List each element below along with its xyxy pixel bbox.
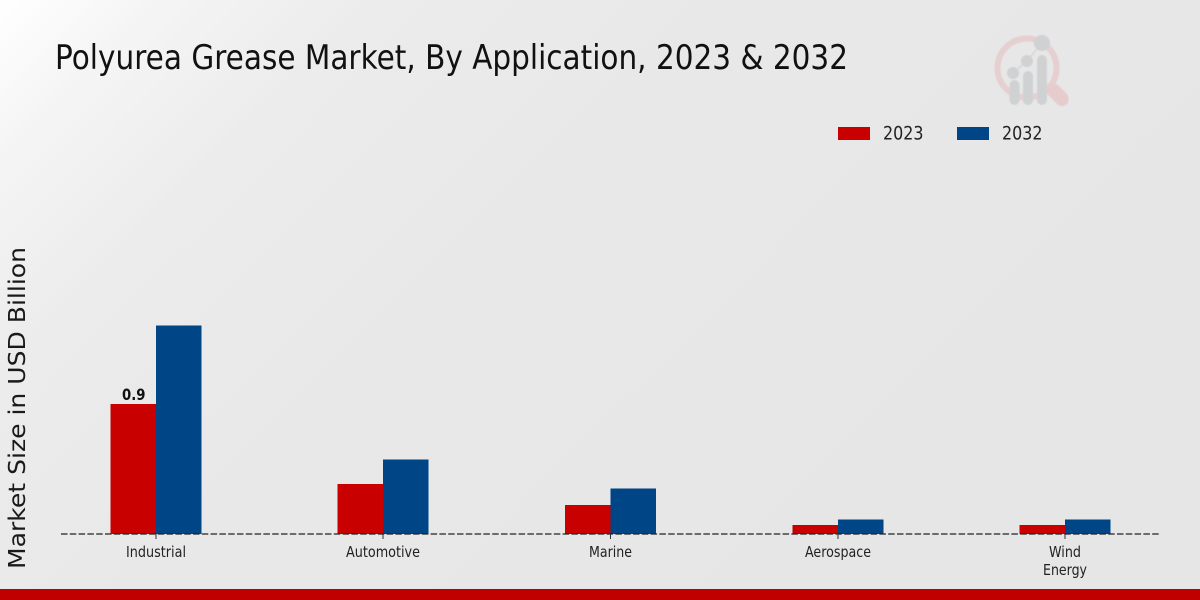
legend <box>838 122 1042 144</box>
x-axis label: Industrial: Industrial <box>126 543 186 561</box>
y-axis title: Market Size in USD Billion <box>3 247 31 569</box>
x-axis label: Marine: Marine <box>589 543 632 561</box>
bars: Aerospace <box>792 520 884 534</box>
x-axis label: Wind Energy: Wind <box>1049 543 1081 561</box>
footer bar <box>0 589 1200 600</box>
legend label: 2023: 2023 <box>883 122 924 144</box>
legend swatch: 2032 <box>957 127 989 140</box>
icon: watermark logo <box>998 35 1062 105</box>
x-axis label: Wind Energy <box>1043 543 1087 579</box>
legend label: 2032: 2032 <box>1002 122 1042 144</box>
x-axis label: Aerospace: Aerospace <box>805 543 871 561</box>
x-axis label: Wind Energy: Energy <box>1043 561 1087 579</box>
title: Polyurea Grease Market, By Application, 2023 & 2032 <box>55 38 848 78</box>
bars: Industrial <box>110 326 202 534</box>
bars: Automotive <box>338 460 428 534</box>
bar chart <box>61 326 1159 579</box>
bars: Marine <box>565 488 656 534</box>
x-axis baseline <box>61 533 1159 535</box>
data label: 0.9: 0.9 <box>122 385 146 404</box>
legend swatch: 2023 <box>838 127 870 140</box>
x-axis label: Automotive: Automotive <box>346 543 420 561</box>
bars: Wind Energy <box>1020 520 1110 534</box>
